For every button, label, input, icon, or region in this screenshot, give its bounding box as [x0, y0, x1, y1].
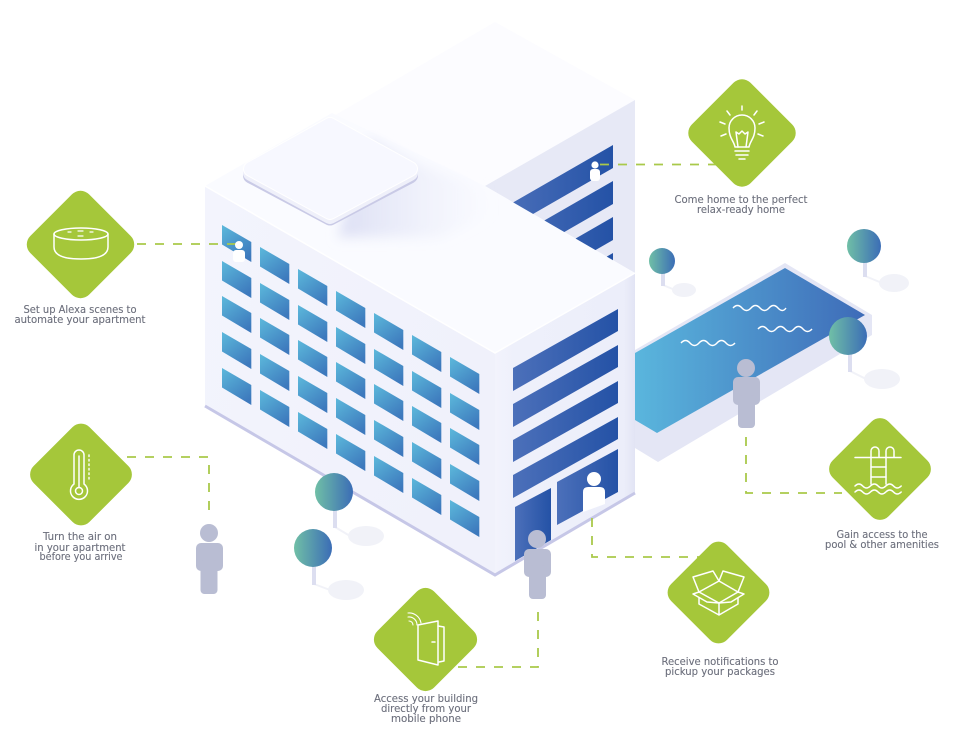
- water: [635, 268, 865, 433]
- caption: Set up Alexa scenes to: [24, 304, 136, 316]
- callout: packages: [662, 537, 778, 678]
- person: walking left: [196, 524, 223, 594]
- caption: mobile phone: [391, 713, 461, 725]
- caption: [662, 656, 778, 678]
- caption: relax-ready home: [697, 204, 785, 216]
- caption: [14, 304, 146, 326]
- caption: [825, 529, 939, 551]
- diamond: [683, 74, 801, 192]
- caption: pool & other amenities: [825, 539, 939, 551]
- callout: pool: [824, 413, 939, 551]
- icon: smart door: [408, 613, 444, 665]
- base edge: [205, 406, 635, 575]
- building: [205, 22, 635, 575]
- tree: building lower: [294, 529, 364, 600]
- caption: in your apartment: [34, 542, 126, 554]
- caption: [34, 531, 126, 563]
- person: entrance: [524, 530, 551, 599]
- icon: open box: [693, 571, 744, 615]
- caption: automate your apartment: [14, 314, 146, 326]
- connector lines: [127, 164, 842, 667]
- rooftop unit: [251, 125, 410, 218]
- caption: Turn the air on: [42, 531, 117, 543]
- caption: Access your building: [374, 693, 478, 705]
- person: rear window: [590, 161, 600, 181]
- icon: pool ladder: [855, 447, 901, 494]
- icon: thermometer: [70, 450, 89, 499]
- icon: light bulb: [720, 106, 764, 159]
- person: lobby window: [583, 472, 605, 512]
- person: window left: [233, 241, 245, 262]
- caption: directly from your: [381, 703, 472, 715]
- roof: [205, 113, 635, 353]
- caption: pickup your packages: [665, 666, 775, 678]
- diamond: [824, 413, 936, 525]
- roof shadow: [338, 138, 492, 237]
- callout: door access: [369, 583, 482, 725]
- pool: [635, 263, 872, 462]
- caption: Receive notifications to: [662, 656, 778, 668]
- caption: [674, 194, 808, 216]
- right facade windows: [513, 309, 618, 525]
- person: pool: [733, 359, 760, 428]
- caption: before you arrive: [40, 551, 122, 563]
- tree: pool left: [649, 248, 696, 297]
- caption: Gain access to the: [836, 529, 928, 541]
- right facade: [495, 273, 635, 575]
- tree: building upper: [315, 473, 384, 546]
- pool deck: [635, 263, 872, 462]
- callout: thermostat: [25, 419, 137, 563]
- diamond: [25, 419, 137, 530]
- caption: Come home to the perfect: [674, 194, 808, 206]
- roof edge highlight: [205, 186, 635, 353]
- diamond: [663, 537, 774, 648]
- rear wing wall: [485, 100, 635, 273]
- rear wing windows: [500, 145, 613, 341]
- icon: smart speaker: [54, 228, 108, 259]
- diamond: [369, 583, 482, 696]
- diamond: [22, 186, 139, 303]
- tree: pool far: [847, 229, 909, 292]
- upper roof: [332, 22, 635, 240]
- callout: alexa: [14, 186, 146, 326]
- left facade windows: [222, 225, 479, 537]
- callout: lighting: [674, 74, 808, 216]
- waves: [681, 306, 812, 346]
- tree: pool near: [829, 317, 900, 389]
- entrance door: [515, 488, 551, 561]
- caption: [374, 693, 478, 725]
- left facade: [205, 186, 495, 575]
